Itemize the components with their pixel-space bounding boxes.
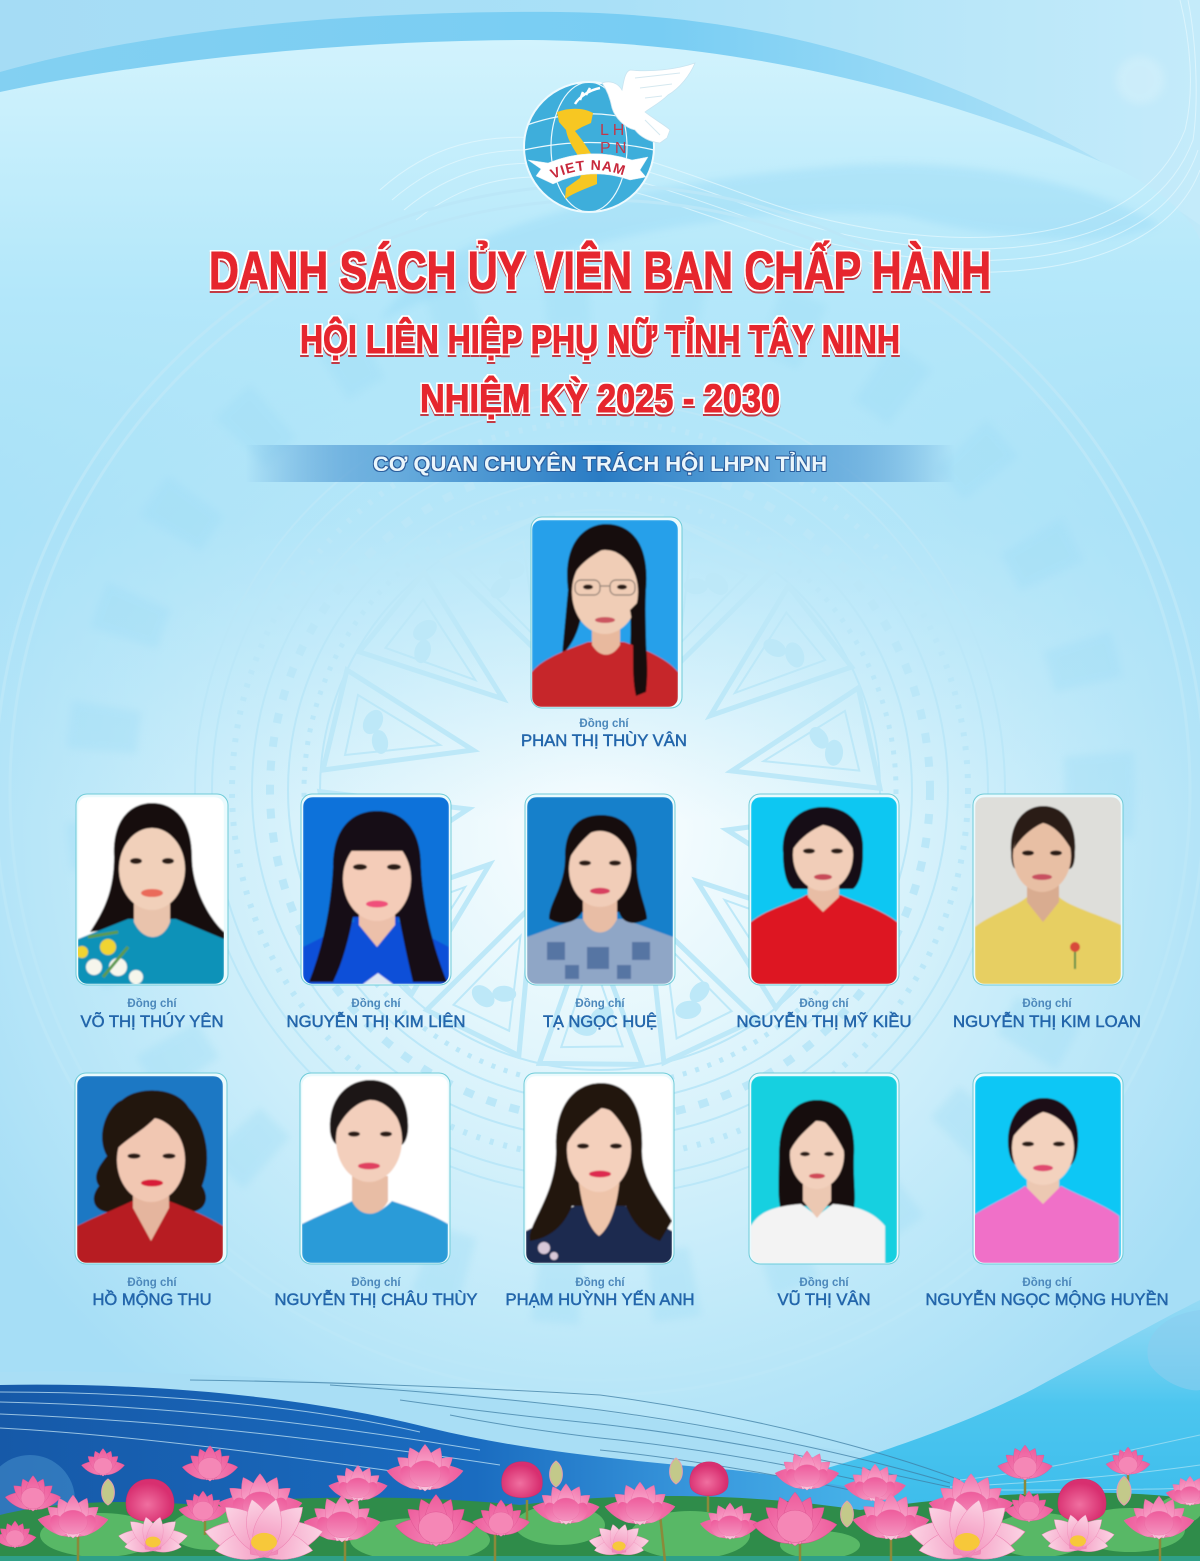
name: Đồng chí [575,1277,625,1289]
portrait [76,794,228,985]
member: Pham Huynh Yen Anh [506,1073,694,1309]
name: Đồng chí [351,998,401,1010]
drum pattern watermark [0,185,1200,1395]
section banner: CƠ QUAN CHUYÊN TRÁCH HỘI LHPN TỈNH [373,452,827,476]
bottom waves [0,1300,1200,1561]
title [209,240,991,421]
portrait [973,794,1123,985]
name: PHẠM HUỲNH YẾN ANH [506,1290,694,1309]
portrait [749,1073,899,1264]
section banner [245,445,955,482]
name: Đồng chí [127,1277,177,1289]
name [543,998,657,1031]
name [778,1277,870,1309]
lotus flowers [0,1443,1200,1561]
name: Đồng chí [351,1277,401,1289]
portrait [524,1073,674,1264]
name: HỒ MỘNG THU [92,1290,212,1309]
portrait [973,1073,1123,1264]
name: VÕ THỊ THÚY YÊN [80,1012,224,1031]
member: Ta Ngoc Hue [525,794,675,1031]
name [506,1277,694,1309]
name [80,998,224,1031]
name [736,998,912,1031]
member: Ho Mong Thu [75,1073,227,1309]
name: NGUYỄN THỊ KIM LIÊN [286,1012,466,1031]
name: Đồng chí [575,998,625,1010]
name [286,998,466,1031]
portrait [525,794,675,985]
title line 2: HỘI LIÊN HIỆP PHỤ NỮ TỈNH TÂY NINH [300,316,900,362]
logo: Hoi LHPN Viet Nam: L H [600,122,624,139]
member: Vo Thi Thuy Yen [76,794,228,1031]
member: Nguyen Thi Kim Lien [286,794,466,1031]
portrait [749,794,899,985]
name: Đồng chí [579,718,629,730]
name: NGUYỄN THỊ MỸ KIỀU [736,1012,912,1031]
name: Đồng chí [1022,1277,1072,1289]
member: Nguyen Ngoc Mong Huyen [926,1073,1168,1309]
name: TẠ NGỌC HUỆ [543,1012,657,1031]
logo: Hoi LHPN Viet Nam: P N [600,140,626,157]
logo: Hoi LHPN Viet Nam: VIET NAM [549,160,626,178]
portrait [301,794,451,985]
lotus field [0,1443,1200,1561]
name [953,998,1141,1031]
name: VŨ THỊ VÂN [778,1290,870,1309]
name [92,1277,212,1309]
member: Nguyen Thi My Kieu [736,794,912,1031]
name: Đồng chí [127,998,177,1010]
name: Đồng chí [1022,998,1072,1010]
name: NGUYỄN THỊ KIM LOAN [953,1012,1141,1031]
name: PHAN THỊ THÙY VÂN [521,731,687,750]
name: NGUYỄN NGỌC MỘNG HUYỀN [926,1290,1168,1309]
logo: Hoi LHPN Viet Nam [523,62,696,213]
portrait [531,517,682,708]
title line 3: NHIỆM KỲ 2025 - 2030 [420,375,780,421]
name: NGUYỄN THỊ CHÂU THÙY [274,1290,478,1309]
member: Nguyen Thi Kim Loan [953,794,1141,1031]
portrait [75,1073,227,1264]
member: Phan Thi Thuy Van [521,517,687,750]
member: Nguyen Thi Chau Thuy [274,1073,478,1309]
name [274,1277,478,1309]
member: Vu Thi Van [749,1073,899,1309]
name: Đồng chí [799,998,849,1010]
name: Đồng chí [799,1277,849,1289]
name [926,1277,1168,1309]
portrait [300,1073,450,1264]
name [521,718,687,750]
